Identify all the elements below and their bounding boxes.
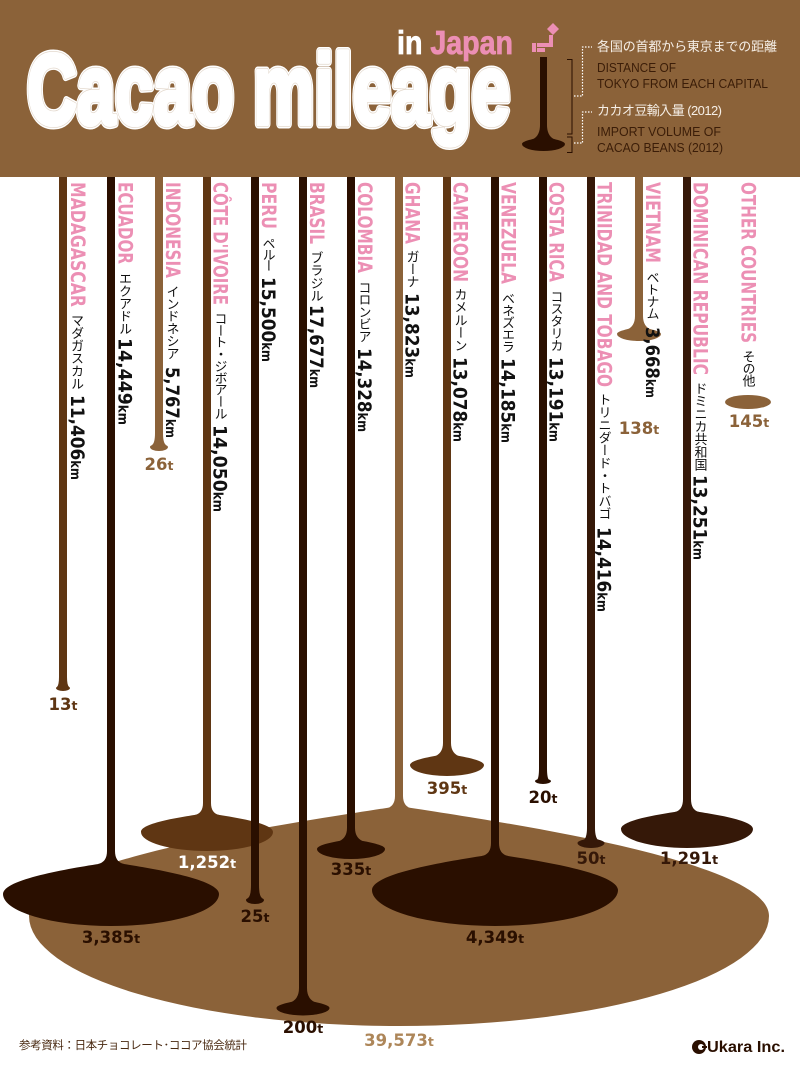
legend text: distance: DISTANCE OF — [597, 60, 676, 75]
label: Costa Rica: COSTA RICA — [544, 182, 568, 282]
label: Cameroon: カメルーン — [452, 288, 468, 352]
label: Other countries: その他 — [740, 350, 756, 388]
drop: Costa Rica — [535, 170, 551, 784]
label: Venezuela — [496, 182, 520, 443]
label: Trinidad and Tobago: 14,416km — [592, 527, 614, 612]
legend text: distance: 各国の首都から東京までの距離 — [597, 39, 777, 54]
Ghana stream and total pool — [29, 170, 769, 1026]
label: Venezuela: VENEZUELA — [496, 182, 520, 284]
label: Indonesia: インドネシア — [164, 285, 180, 360]
label: Trinidad and Tobago: トリニダード・トバゴ — [596, 393, 612, 520]
tonnage values: 25t — [241, 907, 269, 926]
label: Indonesia: 5,767km — [161, 367, 183, 438]
drop: Brasil — [276, 170, 330, 1016]
label: Other countries: OTHER COUNTRIES — [736, 182, 760, 343]
legend icon: drop — [522, 57, 565, 151]
drop: Other countries — [725, 395, 771, 409]
label: Peru — [257, 182, 280, 362]
label: Venezuela: ベネズエラ — [500, 292, 515, 353]
logo: Ukara Inc.: Ukara Inc. — [707, 1039, 785, 1056]
tonnage values — [49, 412, 769, 1050]
drop: Venezuela — [372, 170, 618, 926]
label: Peru: ペルー — [260, 237, 276, 272]
label: Cameroon: 13,078km — [448, 357, 470, 442]
tonnage values: 145t — [729, 412, 769, 431]
label: Colombia: 14,328km — [353, 348, 375, 432]
label: Ghana: ガーナ — [404, 250, 420, 288]
drop: Trinidad and Tobago — [578, 170, 604, 848]
drop: Dominican Republic — [621, 170, 753, 848]
label: Costa Rica: 13,191km — [544, 357, 566, 442]
drop: Madagascar — [56, 170, 70, 691]
label: Ecuador — [114, 182, 136, 425]
header band — [0, 0, 800, 177]
drop: Côte d'Ivoire — [141, 170, 273, 851]
label: Brasil — [305, 182, 328, 388]
label: Ghana: GHANA — [400, 182, 424, 244]
label: Ecuador: ECUADOR — [114, 182, 136, 264]
legend text: import volume — [597, 103, 723, 155]
label: Dominican Republic — [688, 182, 712, 560]
tonnage values: 50t — [577, 849, 605, 868]
label: Vietnam: 3,668km — [641, 327, 663, 398]
tonnage values: 4,349t — [466, 928, 524, 947]
label: Brasil: ブラジル — [308, 250, 324, 302]
label: Côte d'Ivoire: 14,050km — [208, 425, 230, 512]
title: Cacao mileage — [27, 34, 510, 146]
legend brackets — [567, 60, 572, 152]
label: Indonesia — [161, 182, 184, 438]
label: Cameroon: CAMEROON — [448, 182, 472, 282]
tonnage values: 335t — [331, 860, 371, 879]
legend dotted leaders — [574, 47, 592, 143]
title — [27, 34, 510, 146]
drop: Colombia — [317, 170, 385, 859]
tonnage values: 395t — [427, 779, 467, 798]
tonnage values: 1,291t — [660, 849, 718, 868]
legend text: import volume: CACAO BEANS (2012) — [597, 140, 723, 155]
label: Brasil: BRASIL — [305, 182, 328, 244]
label: Venezuela: 14,185km — [496, 358, 518, 443]
tonnage values: 1,252t — [178, 853, 236, 872]
label: Côte d'Ivoire: コート・ジボアール — [212, 312, 228, 420]
icon: pink pixel mark — [532, 23, 559, 52]
label: Indonesia: INDONESIA — [161, 182, 184, 278]
tonnage values: 3,385t — [82, 928, 140, 947]
label: Brasil: 17,677km — [305, 305, 327, 388]
label: Vietnam: ベトナム — [644, 271, 660, 320]
title: Cacao mileage — [27, 34, 510, 146]
legend text: import volume: IMPORT VOLUME OF — [597, 124, 721, 139]
label: Trinidad and Tobago — [592, 182, 616, 612]
label: Dominican Republic: DOMINICAN REPUBLIC — [688, 182, 712, 375]
legend text: distance — [597, 39, 777, 91]
label: Vietnam — [641, 182, 664, 398]
label: Madagascar — [66, 182, 89, 480]
source note: 参考資料：日本チョコレート･ココア協会統計 — [19, 1038, 248, 1052]
drop: Ecuador — [3, 170, 219, 926]
tonnage values: 39,573t — [364, 1031, 434, 1050]
label: Costa Rica — [544, 182, 568, 442]
label: Trinidad and Tobago: TRINIDAD AND TOBAGO — [592, 182, 616, 387]
label: Dominican Republic: 13,251km — [688, 475, 710, 560]
label: Madagascar: 11,406km — [66, 395, 88, 480]
tonnage values: 20t — [529, 788, 557, 807]
label: Côte d'Ivoire — [208, 182, 232, 512]
label: Vietnam: VIETNAM — [641, 182, 664, 263]
label: Madagascar: MADAGASCAR — [66, 182, 89, 307]
label: Ecuador: 14,449km — [114, 338, 136, 425]
label: Ghana — [400, 182, 424, 378]
label: Costa Rica: コスタリカ — [548, 290, 564, 352]
tonnage values: 200t — [283, 1018, 323, 1037]
legend text: distance: TOKYO FROM EACH CAPITAL — [597, 76, 768, 91]
label: Côte d'Ivoire: CÔTE D'IVOIRE — [208, 182, 232, 305]
drop: Cameroon — [410, 170, 484, 776]
label: Peru: 15,500km — [257, 277, 279, 362]
label: Cameroon — [448, 182, 472, 442]
subtitle: in Japan: in Japan — [397, 24, 513, 61]
label: Colombia: コロンビア — [356, 281, 372, 343]
label: Madagascar: マダガスカル — [69, 314, 84, 390]
label: Ghana: 13,823km — [400, 293, 422, 378]
label: Dominican Republic: ドミニカ共和国 — [692, 382, 708, 471]
tonnage values: 138t — [619, 419, 659, 438]
drop: Vietnam — [617, 170, 661, 341]
tonnage values: 13t — [49, 695, 77, 714]
label: Colombia: COLOMBIA — [353, 182, 376, 273]
label: Colombia — [353, 182, 376, 432]
drop: Peru — [246, 170, 264, 904]
drop: Indonesia — [150, 170, 168, 451]
title: Cacao mileage — [27, 34, 510, 146]
label: Peru: PERU — [257, 182, 280, 229]
legend text: import volume: カカオ豆輸入量 (2012) — [597, 103, 722, 118]
tonnage values: 26t — [145, 455, 173, 474]
label: Ecuador: エクアドル — [117, 272, 132, 335]
